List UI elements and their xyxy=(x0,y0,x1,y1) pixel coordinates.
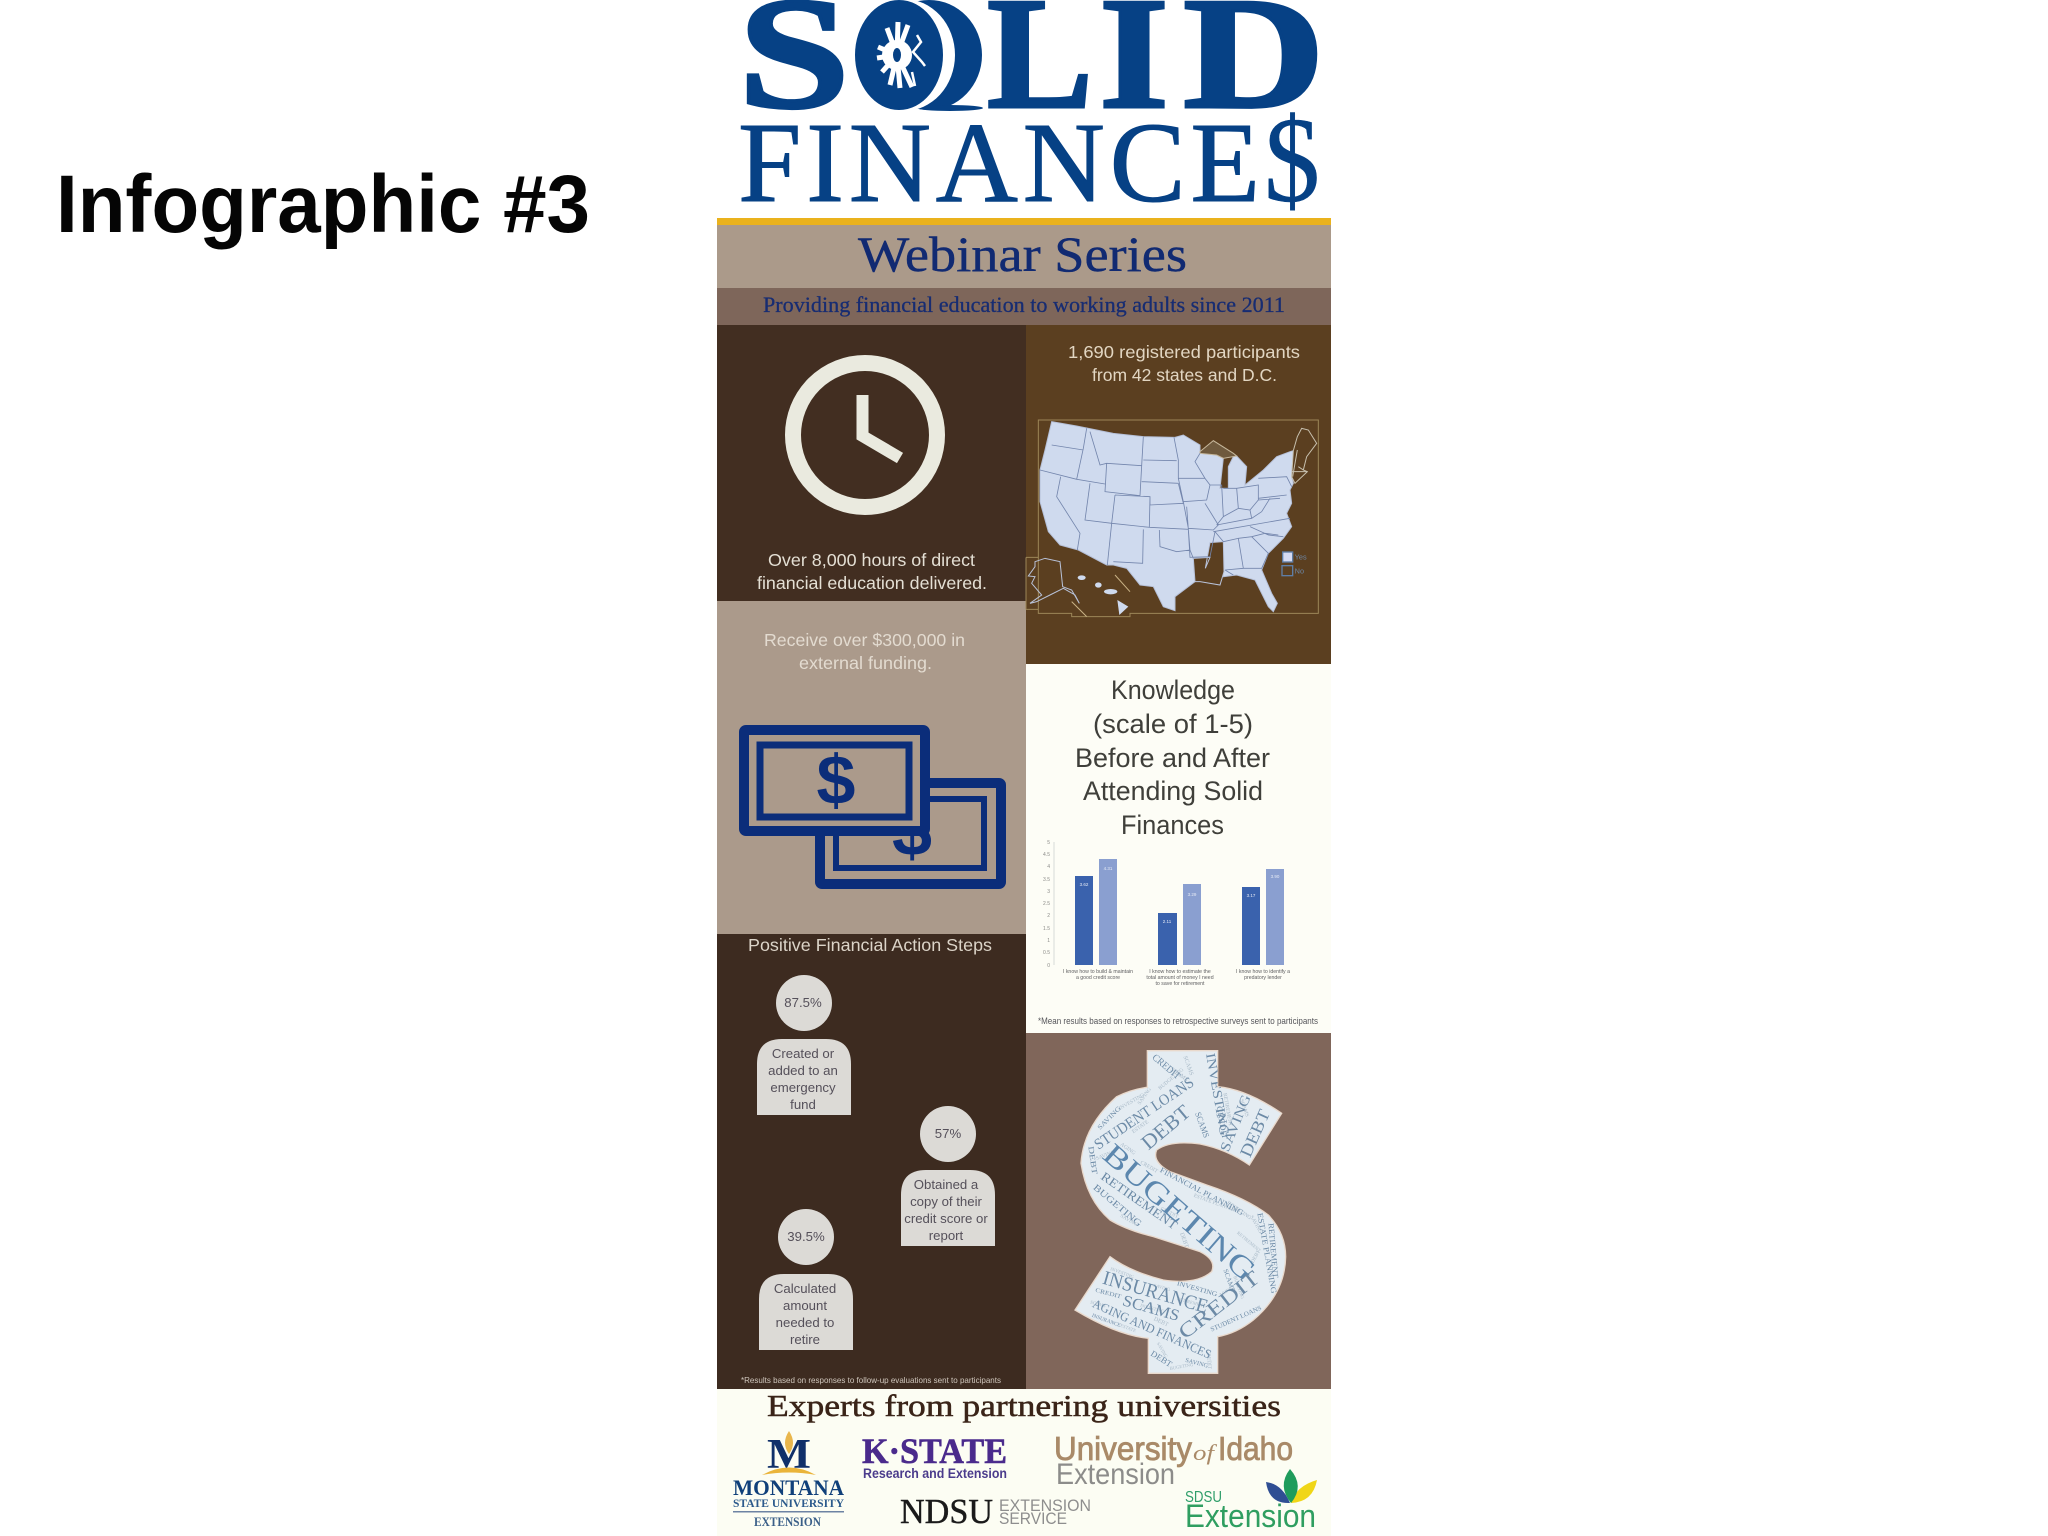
gold divider bar xyxy=(717,218,1331,225)
person: 87.5% emergency fund: added to an xyxy=(768,1063,838,1078)
icon: dollar sign word cloud: INVESTING xyxy=(1203,1052,1232,1137)
icon: back bill: $ xyxy=(892,791,932,871)
logo: K-State Research and Extension: Research and Extension xyxy=(863,1466,1007,1481)
person: 39.5% retirement amount xyxy=(759,1209,853,1350)
icon: dollar sign word cloud: INVESTING xyxy=(1118,1092,1146,1112)
icon: dollar sign word cloud: INVESTING xyxy=(1226,1200,1252,1221)
heading band: Webinar Series: Webinar Series xyxy=(858,226,1187,282)
footnote: follow-up evaluations: *Results based on responses to follow-up evaluations sent to participants xyxy=(741,1375,1001,1385)
legend: Yes xyxy=(1295,552,1307,561)
icon: dollar sign word cloud: DEBT xyxy=(1250,1249,1262,1264)
icon: dollar sign word cloud: INVESTING xyxy=(1176,1280,1218,1298)
panel: hours of education xyxy=(717,325,1026,601)
icon: dollar sign word cloud: SCAMS xyxy=(1238,1099,1250,1118)
icon: dollar sign word cloud: SCAMS xyxy=(1193,1111,1212,1139)
logo: NDSU Extension Service: NDSU xyxy=(900,1492,993,1531)
inset: Hawaii xyxy=(1078,575,1128,615)
logo: SDSU Extension: Extension xyxy=(1185,1498,1316,1534)
icon: dollar sign word cloud: BUGETING xyxy=(1231,1276,1245,1300)
bar chart: 2.5 xyxy=(1043,901,1050,907)
text: hours delivered xyxy=(757,550,987,593)
icon: dollar sign word cloud: BUDGETING xyxy=(1157,1067,1185,1092)
panel: registered participants map xyxy=(1026,325,1331,664)
icon: dollar sign word cloud: CREDIT xyxy=(1139,1160,1159,1175)
logo: K-State Research and Extension: K·STATE xyxy=(862,1431,1007,1471)
dark states: MS, LA xyxy=(1193,542,1224,585)
bar chart: predatory lender xyxy=(1244,975,1282,981)
bar chart: 1 xyxy=(1047,938,1050,944)
icon: dollar sign word cloud: SCAMS xyxy=(1089,1300,1106,1309)
icon: dollar sign word cloud: SCAMS xyxy=(1121,1293,1181,1325)
icon: dollar sign word cloud: RETIREMENT xyxy=(1098,1169,1180,1233)
icon: dollar sign word cloud: SAVING xyxy=(1218,1093,1255,1154)
icon: dollar sign word cloud: SCAMS xyxy=(1169,1067,1189,1083)
person: 39.5% retirement amount: retire xyxy=(790,1332,820,1347)
icon: dollar sign word cloud: DEBT xyxy=(1236,1106,1274,1160)
panel: positive financial action steps xyxy=(717,934,1026,1390)
icon: dollar sign word cloud: ESTATE PLANNING xyxy=(1255,1212,1278,1294)
text: funding: external funding. xyxy=(799,653,932,673)
heading: knowledge: Before and After xyxy=(1075,743,1270,773)
slide title: Infographic #3 xyxy=(56,159,590,250)
bar chart: 2 xyxy=(1047,913,1050,919)
icon: dollar sign word cloud: DEBT xyxy=(1178,1232,1189,1249)
icon: front bill: $ xyxy=(817,741,855,819)
text: participants xyxy=(1068,342,1300,385)
icon: dollar sign word cloud: INSURANCE xyxy=(1193,1166,1223,1182)
icon: dollar sign word cloud: DEBT xyxy=(1086,1146,1099,1175)
person: 57% credit report: Obtained a xyxy=(914,1177,979,1192)
Michigan upper peninsula xyxy=(1200,441,1237,458)
person: 57% credit report: credit score or xyxy=(904,1211,988,1226)
inset: Alaska xyxy=(1028,558,1079,603)
dark states: New England xyxy=(1292,428,1317,483)
heading band: Webinar Series xyxy=(717,225,1331,288)
text: hours delivered: Over 8,000 hours of direct xyxy=(768,550,975,570)
logo: NDSU Extension Service xyxy=(900,1492,1091,1531)
person: 39.5% retirement amount: needed to xyxy=(776,1315,834,1330)
icon: dollar sign word cloud: CREDIT xyxy=(1215,1105,1229,1140)
heading: knowledge: Knowledge xyxy=(1111,675,1235,705)
panel: partnering universities xyxy=(717,1388,1331,1536)
logo word: SOLID xyxy=(738,0,1325,142)
icon: clock xyxy=(793,363,937,507)
logo: SDSU Extension: SDSU xyxy=(1185,1489,1222,1506)
text: funding xyxy=(764,630,965,673)
icon: dollar sign word cloud: SAVING xyxy=(1119,1213,1139,1228)
icon: dollar sign word cloud: BUGETING xyxy=(1096,1137,1263,1288)
person: 39.5% retirement amount: amount xyxy=(783,1298,827,1313)
icon: front bill xyxy=(744,730,925,831)
bar chart: 2.11 xyxy=(1163,919,1172,924)
logo: SDSU Extension xyxy=(1185,1469,1317,1534)
icon: dollar sign word cloud xyxy=(1075,1051,1286,1373)
heading: knowledge: (scale of 1-5) xyxy=(1093,709,1253,739)
text: funding: Receive over $300,000 in xyxy=(764,630,965,650)
logo: Montana State University Extension: MONTANA xyxy=(733,1475,844,1500)
heading: knowledge xyxy=(1075,675,1270,840)
person: 87.5% emergency fund: 87.5% xyxy=(784,995,822,1010)
icon: dollar sign word cloud: AGING xyxy=(1119,1142,1136,1157)
bar chart: 4 xyxy=(1047,864,1050,870)
logo: NDSU Extension Service: SERVICE xyxy=(999,1510,1067,1528)
logo word: FINANCE$: FINANCE xyxy=(738,99,1260,226)
subheading band xyxy=(717,288,1331,325)
panel: knowledge chart xyxy=(1026,664,1331,1033)
legend: No xyxy=(1295,566,1304,575)
bar chart: 3 xyxy=(1047,889,1050,895)
logo: University of Idaho Extension: of xyxy=(1193,1440,1218,1465)
person: 87.5% emergency fund: Created or xyxy=(772,1046,835,1061)
icon: dollar sign word cloud: DEBT xyxy=(1137,1101,1195,1154)
icon: dollar sign word cloud: FINANCIAL PLANNING xyxy=(1158,1165,1245,1217)
logo: University of Idaho Extension: Extension xyxy=(1056,1458,1175,1491)
person: 57% credit report: 57% xyxy=(935,1126,961,1141)
state lines xyxy=(1040,428,1292,575)
logo: Montana State University Extension: EXTENSION xyxy=(754,1515,821,1529)
icon: dollar sign word cloud: STUDENT LOANS xyxy=(1210,1305,1263,1333)
subheading band: Providing financial education to working adults since 2011 xyxy=(763,292,1285,317)
heading: action steps: Positive Financial Action Steps xyxy=(748,935,992,955)
icon: dollar sign word cloud: INSURANCE xyxy=(1100,1267,1210,1318)
person: 87.5% emergency fund: fund xyxy=(790,1097,816,1112)
chart: US map xyxy=(1026,420,1318,617)
bar chart: 5 xyxy=(1047,840,1050,846)
person: 39.5% retirement amount: 39.5% xyxy=(787,1229,825,1244)
icon: dollar sign word cloud: RETIREMENT xyxy=(1221,1093,1233,1128)
bar chart: 4.5 xyxy=(1043,852,1050,858)
icon: dollar sign word cloud: SAVING xyxy=(1184,1358,1209,1370)
icon: dollar sign word cloud: SCAMS xyxy=(1221,1268,1236,1293)
icon: dollar sign word cloud: SAVING xyxy=(1155,1342,1168,1360)
logo: NDSU Extension Service: EXTENSION xyxy=(999,1497,1091,1515)
bar chart: I know how to build & maintain xyxy=(1063,969,1133,975)
icon: dollar sign word cloud: AGING xyxy=(1218,1286,1235,1298)
text: hours delivered: financial education delivered. xyxy=(757,573,987,593)
person: 57% credit report: report xyxy=(929,1228,964,1243)
logo: University of Idaho Extension: University xyxy=(1054,1430,1192,1467)
bar chart: I know how to identify a xyxy=(1236,969,1290,975)
icon: dollar sign word cloud: CREDIT xyxy=(1094,1288,1122,1301)
icon: dollar sign word cloud: SAVING xyxy=(1095,1150,1116,1162)
person: 57% credit report xyxy=(901,1106,995,1246)
person: 87.5% emergency fund: emergency xyxy=(770,1080,836,1095)
person: 87.5% emergency fund xyxy=(757,975,851,1115)
icon: dollar sign word cloud: BUGETING xyxy=(1091,1183,1143,1229)
icon: dollar sign word cloud: BUGETING xyxy=(1169,1363,1194,1372)
heading: experts: Experts from partnering universities xyxy=(767,1388,1281,1423)
icon: dollar sign word cloud: INSURANCE xyxy=(1091,1313,1121,1329)
footnote: retrospective surveys: *Mean results based on responses to retrospective surveys sent to participants xyxy=(1038,1016,1318,1027)
icon: dollar sign word cloud: INVESTING xyxy=(1212,1167,1238,1183)
icon: dollar sign word cloud: INVESTING xyxy=(1139,1304,1165,1315)
icon: back bill xyxy=(820,783,1001,884)
bar chart: 4.31 xyxy=(1104,866,1113,871)
logo: University of Idaho Extension xyxy=(1054,1430,1293,1491)
icon: dollar sign word cloud: ESTATE PLANNING xyxy=(1193,1193,1239,1215)
icon: dollar sign word cloud: DEBT xyxy=(1152,1316,1169,1329)
icon: dollar sign word cloud: INVESTING xyxy=(1109,1267,1135,1281)
logo: Montana State University Extension xyxy=(733,1431,844,1529)
text: participants: 1,690 registered participants xyxy=(1068,342,1300,362)
icon: dollar sign word cloud: ESTATE xyxy=(1119,1324,1137,1334)
icon: dollar sign word cloud: CREDIT xyxy=(1159,1206,1180,1220)
icon: dollar sign word cloud: DEBT xyxy=(1149,1348,1175,1369)
bar chart: 3.17 xyxy=(1247,893,1256,898)
bar chart: 0.5 xyxy=(1043,950,1050,956)
logo word: FINANCE$: $ xyxy=(1264,93,1320,228)
person: 39.5% retirement amount: Calculated xyxy=(774,1281,836,1296)
bar chart: 3.5 xyxy=(1043,877,1050,883)
icon: dollar sign word cloud: STUDENT LOANS xyxy=(1091,1074,1197,1153)
bar chart: 0 xyxy=(1047,963,1050,969)
icon: dollar sign word cloud: SAVING xyxy=(1153,1284,1171,1293)
icon: dollar sign word cloud: CREDIT xyxy=(1205,1350,1212,1370)
logo: Montana State University Extension: M xyxy=(767,1432,811,1478)
bar chart: to save for retirement xyxy=(1155,981,1205,987)
icon: dollar sign word cloud: RETIREMENT xyxy=(1266,1223,1280,1278)
icon: dollar sign word cloud: CREDIT xyxy=(1150,1052,1182,1082)
bar chart: I know how to estimate the xyxy=(1149,969,1211,975)
logo: Montana State University Extension: STATE UNIVERSITY xyxy=(733,1496,844,1510)
icon: dollar sign word cloud: CREDIT xyxy=(1175,1267,1265,1344)
heading: knowledge: Attending Solid xyxy=(1083,776,1263,806)
bar chart xyxy=(1043,840,1290,987)
person: 57% credit report: copy of their xyxy=(910,1194,983,1209)
icon: dollar sign word cloud: ESTATE xyxy=(1131,1119,1150,1135)
bar chart: 3.29 xyxy=(1188,892,1197,897)
text: participants: from 42 states and D.C. xyxy=(1092,365,1277,385)
bar chart: 3.90 xyxy=(1271,874,1280,879)
logo: University of Idaho Extension: Idaho xyxy=(1218,1430,1293,1467)
heading: knowledge: Finances xyxy=(1121,810,1224,840)
logo: Solid Finance$ xyxy=(738,0,1325,228)
panel: external funding xyxy=(717,601,1026,934)
legend xyxy=(1282,552,1307,576)
bar chart: 1.5 xyxy=(1043,926,1050,932)
icon: dollar sign word cloud: SAVING xyxy=(1248,1215,1263,1235)
icon: dollar sign word cloud: SAVING xyxy=(1096,1105,1123,1131)
icon: O disc with gear xyxy=(853,0,983,111)
bar chart: a good credit score xyxy=(1076,975,1120,981)
bar chart: total amount of money I need xyxy=(1146,975,1214,981)
panel: dollar word cloud xyxy=(1026,1033,1331,1389)
bar chart: 3.62 xyxy=(1080,882,1089,887)
icon: dollar sign word cloud: RETIREMENT xyxy=(1176,1297,1206,1310)
icon: dollar sign word cloud: SCAMS xyxy=(1181,1055,1194,1076)
icon: dollar sign word cloud: AGING AND FINANCES xyxy=(1090,1297,1213,1362)
icon: dollar sign word cloud: RETIREMENT xyxy=(1235,1231,1261,1254)
icon: dollar sign word cloud: SAVING xyxy=(1137,1087,1153,1106)
